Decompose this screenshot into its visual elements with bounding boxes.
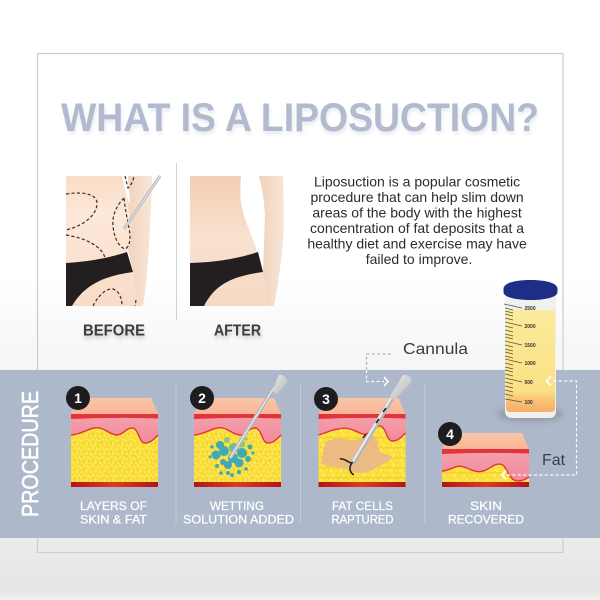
- description text: concentration of fat deposits that a: [310, 220, 524, 236]
- arrow: cannula callout: [366, 354, 391, 386]
- step 1 number: [66, 386, 90, 410]
- label: after: AFTER: [214, 322, 261, 340]
- step 2: skin with wetting solution: [194, 398, 281, 487]
- step 4 number: [438, 422, 462, 446]
- step 1 label: SKIN & FAT: [80, 512, 148, 526]
- label: before: BEFORE: [83, 322, 145, 340]
- step 4 number: 4: [446, 426, 454, 442]
- vial scale: [504, 304, 522, 402]
- procedure heading: PROCEDURE: [17, 391, 43, 517]
- fat removal cavity: [321, 436, 392, 473]
- step 4 label: RECOVERED: [448, 512, 524, 526]
- collection vial: 2000: [524, 324, 536, 330]
- band dividers: [176, 384, 425, 524]
- description text: healthy diet and exercise may have: [307, 236, 527, 252]
- step 3: skin with ruptured fat: [318, 398, 406, 487]
- step 3 label: RAPTURED: [332, 512, 394, 526]
- label: after: AFTER: [215, 326, 262, 342]
- collection vial: 1500: [524, 343, 536, 349]
- divider: [176, 163, 178, 320]
- step 3 label: FAT CELLS: [332, 499, 393, 513]
- step 2 number: [190, 386, 214, 410]
- label: before: BEFORE: [84, 326, 146, 342]
- fat callout label: Fat: [542, 452, 566, 469]
- step 4 label: SKIN: [470, 499, 502, 513]
- wetting solution droplets: [208, 437, 255, 477]
- illustration: after: [190, 176, 284, 306]
- illustration: before: [66, 176, 160, 306]
- title: WHAT IS A LIPOSUCTION?: [61, 96, 539, 140]
- collection vial: 1000: [524, 361, 536, 367]
- collection vial: 500: [524, 380, 533, 386]
- cannula: step 2: [230, 375, 287, 458]
- step 1 number: 1: [74, 390, 82, 406]
- step 2 label: SOLUTION ADDED: [183, 512, 294, 526]
- outer frame: [38, 54, 563, 552]
- cannula: step 3: [340, 375, 411, 475]
- panel: procedure band: [0, 370, 600, 538]
- collection vial: [497, 280, 563, 421]
- description text: Liposuction is a popular cosmetic: [314, 174, 520, 190]
- description text: failed to improve.: [366, 251, 472, 267]
- collection vial: 100: [524, 400, 533, 406]
- title: WHAT IS A LIPOSUCTION?: [62, 99, 540, 143]
- cannula callout label: Cannula: [403, 341, 468, 358]
- description text: areas of the body with the highest: [312, 204, 522, 220]
- step 2 number: 2: [198, 390, 206, 406]
- step 3 number: 3: [322, 391, 330, 407]
- step 3 number: [314, 387, 338, 411]
- description text: procedure that can help slim down: [310, 189, 524, 205]
- arrow: fat to vial: [502, 376, 576, 480]
- step 4: recovered skin: [442, 433, 529, 487]
- step 1: skin layers: [71, 398, 158, 487]
- collection vial: 2500: [524, 306, 536, 312]
- step 2 label: WETTING: [210, 499, 264, 513]
- step 1 label: LAYERS OF: [80, 499, 147, 513]
